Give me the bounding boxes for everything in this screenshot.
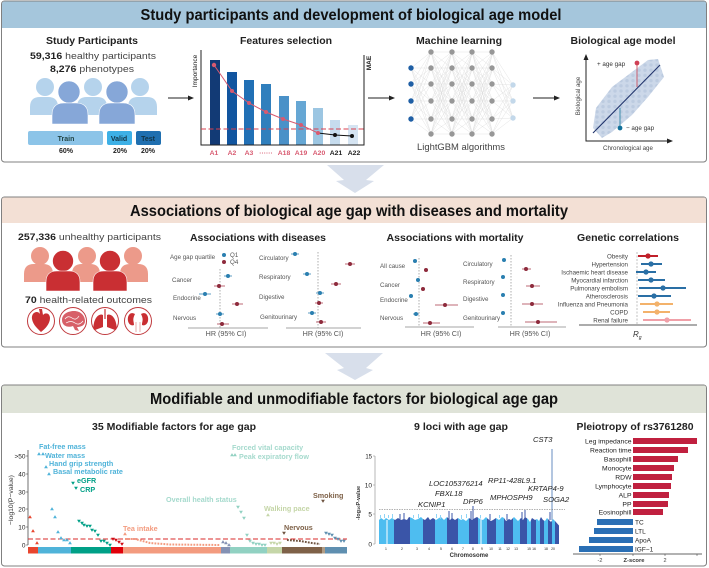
- panel: modifiable and unmodifiable factors: [2, 385, 706, 566]
- chart: genetic correlations: g: [639, 335, 642, 341]
- chart: genome-wide manhattan plot: 0: [368, 542, 372, 548]
- chart: genome-wide manhattan plot: 11: [498, 547, 502, 551]
- panel: study participants and model development: [2, 1, 706, 162]
- chart: genome-wide manhattan plot: 1: [385, 547, 387, 551]
- forest plot: mortality left: HR (95% CI): [421, 329, 461, 338]
- chart: genome-wide manhattan plot: 3: [416, 547, 418, 551]
- chart: pleiotropy z-score bars: Leg impedance: [585, 438, 632, 446]
- header band: panel 3: [2, 386, 706, 413]
- heading: associations with diseases: Associations with diseases: [190, 233, 326, 244]
- arrow: panel 2 to panel 3: [325, 353, 383, 380]
- data split bars: [28, 131, 161, 155]
- chart: genome-wide manhattan plot: KCNIP1: [418, 500, 445, 509]
- forest plot: mortality left: Cancer: [380, 282, 400, 289]
- chart: pleiotropy z-score bars: ALP: [619, 492, 632, 500]
- title: panel 1: Study participants and development of biological age model: [140, 7, 562, 24]
- chart: features importance bars with MAE curve: A21: [330, 150, 342, 157]
- forest plot: diseases right: Respiratory: [259, 274, 292, 281]
- chart: genetic correlations: Atherosclerosis: [586, 294, 628, 300]
- chart: features importance bars with MAE curve: A20: [313, 150, 325, 157]
- chart: biological vs chronological age: − age gap: [626, 125, 655, 132]
- chart: modifiable factors manhattan plot: Water mass: [45, 451, 85, 460]
- chart: genome-wide manhattan plot: [356, 435, 570, 559]
- heading: genetic correlations: Genetic correlations: [577, 233, 679, 244]
- forest plot: mortality right: Circulatory: [463, 261, 493, 268]
- chart: genome-wide manhattan plot: FBXL18: [435, 489, 463, 498]
- chart: features importance bars with MAE curve: A1: [210, 150, 219, 157]
- chart: genome-wide manhattan plot: KRTAP4-9: [528, 484, 564, 493]
- chart: features importance bars with MAE curve: A3: [245, 150, 254, 157]
- forest plot: diseases left: Q1: [230, 252, 239, 259]
- chart: modifiable factors manhattan plot: Fat-free mass: [39, 442, 86, 451]
- text: health outcomes: 70 health-related outcomes: [25, 295, 152, 306]
- forest plot: mortality right: Genitourinary: [463, 315, 501, 322]
- chart: genome-wide manhattan plot: 8: [472, 547, 474, 551]
- chart: genome-wide manhattan plot: DPP6: [463, 497, 484, 506]
- chart: pleiotropy z-score bars: ApoA: [635, 538, 652, 544]
- chart: genome-wide manhattan plot: LOC105376214: [429, 479, 483, 488]
- icon: kidneys: [124, 308, 152, 334]
- heading: features selection: Features selection: [240, 36, 332, 47]
- chart: pleiotropy z-score bars: Basophill: [604, 456, 632, 464]
- forest plot: mortality left: Endocrine: [380, 297, 408, 304]
- icon: heart: [28, 308, 54, 334]
- chart: genome-wide manhattan plot: 10: [489, 547, 493, 551]
- arrow: participants to features: [168, 97, 193, 99]
- chart: biological vs chronological age: [575, 55, 672, 152]
- forest plot: diseases right: HR (95% CI): [303, 329, 343, 338]
- forest plot: mortality left: Nervous: [380, 315, 403, 322]
- chart: modifiable factors manhattan plot: Walking pace: [264, 504, 310, 513]
- text: unhealthy participants: 257,336 unhealthy participants: [18, 232, 161, 243]
- heading: study participants: Study Participants: [46, 36, 138, 47]
- data split bars: Train: [58, 136, 74, 143]
- chart: genetic correlations: R: [633, 330, 639, 339]
- chart: genetic correlations: Hypertension: [592, 262, 629, 268]
- forest plot: diseases right: Genitourinary: [260, 314, 298, 321]
- forest plot: diseases left: Cancer: [172, 277, 192, 284]
- forest plot: diseases right: Circulatory: [259, 255, 289, 262]
- chart: genome-wide manhattan plot: 5: [440, 547, 442, 551]
- chart: features importance bars with MAE curve: A2: [228, 150, 237, 157]
- chart: pleiotropy z-score bars: TC: [635, 520, 644, 526]
- chart: modifiable factors manhattan plot: >50: [14, 454, 26, 460]
- chart: genome-wide manhattan plot: Chromosome: [450, 553, 489, 559]
- chart: genetic correlations: Influenza and Pneumonia: [558, 302, 629, 308]
- chart: pleiotropy z-score bars: RDW: [615, 474, 632, 482]
- chart: genome-wide manhattan plot: 15: [365, 454, 373, 460]
- chart: genetic correlations: Renal failure: [593, 318, 629, 324]
- chart: pleiotropy z-score bars: Monocyte: [602, 466, 632, 472]
- chart: genetic correlations: Myocardial infarction: [571, 278, 629, 284]
- chart: pleiotropy z-score bars: 2: [663, 558, 667, 564]
- chart: genetic correlations: COPD: [610, 310, 629, 316]
- text: participant counts: 8,276 phenotypes: [50, 64, 134, 75]
- forest plot: mortality left: [380, 258, 474, 338]
- forest plot: diseases right: Digestive: [259, 294, 285, 301]
- icon: group of people: [30, 78, 157, 124]
- chart: genome-wide manhattan plot: 10: [365, 482, 372, 490]
- data split bars: 60%: [59, 148, 74, 155]
- chart: genetic correlations: Ischaemic heart disease: [561, 270, 629, 276]
- data split bars: Valid: [111, 136, 127, 143]
- title: panel 2: Associations of biological age gap with diseases and mortality: [130, 203, 568, 220]
- chart: genome-wide manhattan plot: 7: [462, 547, 464, 551]
- forest plot: mortality left: All cause: [380, 263, 406, 270]
- chart: modifiable factors manhattan plot: Hand grip strength: [49, 459, 113, 468]
- heading: modifiable factors: 35 Modifiable factors for age gap: [92, 422, 256, 433]
- forest plot: diseases left: Nervous: [173, 315, 196, 322]
- chart: modifiable factors manhattan plot: 10: [18, 524, 26, 532]
- label: LightGBM algorithms: LightGBM algorithms: [417, 142, 505, 153]
- chart: features importance bars with MAE curve: [192, 50, 373, 157]
- heading: pleiotropy: Pleiotropy of rs3761280: [576, 422, 694, 433]
- chart: genome-wide manhattan plot: 18: [544, 547, 548, 551]
- chart: modifiable factors manhattan plot: −log10(P−value): [8, 475, 15, 525]
- chart: genome-wide manhattan plot: SOGA2: [543, 495, 570, 504]
- forest plot: diseases right: [259, 252, 361, 338]
- chart: genome-wide manhattan plot: 2: [401, 547, 403, 551]
- chart: pleiotropy z-score bars: Lymphocyte: [595, 484, 632, 490]
- forest plot: diseases left: Endocrine: [173, 295, 201, 302]
- chart: modifiable factors manhattan plot: Forced vital capacity: [232, 443, 303, 452]
- forest plot: diseases left: HR (95% CI): [206, 329, 246, 338]
- chart: modifiable factors manhattan plot: eGFR: [77, 476, 97, 485]
- header band: panel 2: [2, 198, 706, 223]
- arrow: features to machine learning: [368, 97, 394, 99]
- data split bars: 20%: [141, 148, 156, 155]
- icon: brain: [60, 308, 86, 334]
- chart: genome-wide manhattan plot: 20: [551, 547, 555, 551]
- chart: modifiable factors manhattan plot: Nervous: [284, 523, 313, 532]
- chart: modifiable factors manhattan plot: [8, 442, 347, 554]
- chart: genome-wide manhattan plot: -log10P-value: [356, 486, 362, 520]
- chart: pleiotropy z-score bars: Z-score: [624, 558, 645, 564]
- chart: features importance bars with MAE curve: A19: [295, 150, 307, 157]
- title: panel 3: Modifiable and unmodifiable factors for biological age gap: [150, 391, 558, 408]
- chart: genome-wide manhattan plot: RP11-428L9.1: [488, 476, 536, 485]
- forest plot: diseases left: Age gap quartile: [170, 254, 216, 261]
- chart: genome-wide manhattan plot: 15: [527, 547, 531, 551]
- forest plot: mortality right: Digestive: [463, 296, 489, 303]
- chart: genetic correlations: Obesity: [607, 254, 629, 260]
- icon: lungs: [92, 308, 118, 334]
- chart: modifiable factors manhattan plot: 30: [18, 490, 26, 496]
- forest plot: mortality right: HR (95% CI): [510, 329, 550, 338]
- diagram: neural network: [408, 49, 516, 137]
- chart: genome-wide manhattan plot: 12: [506, 547, 510, 551]
- chart: genome-wide manhattan plot: MPHOSPH9: [490, 493, 533, 502]
- chart: modifiable factors manhattan plot: 40: [18, 472, 26, 478]
- forest plot: diseases left: Q4: [230, 259, 239, 266]
- panel: associations with diseases and mortality: [2, 197, 706, 347]
- arrow: machine learning to model: [533, 97, 559, 99]
- chart: features importance bars with MAE curve: A18: [278, 150, 290, 157]
- chart: biological vs chronological age: Biological age: [575, 76, 582, 115]
- chart: features importance bars with MAE curve: Importance: [192, 54, 199, 87]
- chart: modifiable factors manhattan plot: Peak expiratory flow: [239, 452, 309, 461]
- chart: pleiotropy z-score bars: LTL: [635, 528, 646, 536]
- chart: modifiable factors manhattan plot: 0: [22, 542, 26, 550]
- chart: biological vs chronological age: Chronological age: [603, 145, 653, 152]
- chart: biological vs chronological age: + age gap: [597, 61, 626, 68]
- chart: modifiable factors manhattan plot: Overall health status: [166, 495, 237, 504]
- chart: genetic correlations: Pulmonary embolism: [570, 286, 628, 292]
- chart: modifiable factors manhattan plot: Basal metabolic rate: [53, 467, 123, 476]
- chart: modifiable factors manhattan plot: Smoking: [313, 491, 343, 500]
- heading: biological age model: Biological age model: [570, 36, 676, 47]
- chart: features importance bars with MAE curve: A22: [348, 150, 360, 157]
- chart: modifiable factors manhattan plot: Tea intake: [123, 524, 158, 533]
- chart: genome-wide manhattan plot: CST3: [533, 435, 553, 444]
- heading: machine learning: Machine learning: [416, 36, 502, 47]
- chart: modifiable factors manhattan plot: 20: [18, 506, 26, 514]
- icon: group of unhealthy people: [24, 247, 148, 291]
- chart: genome-wide manhattan plot: 6: [451, 547, 453, 551]
- heading: 9 loci: 9 loci with age gap: [414, 422, 508, 433]
- chart: modifiable factors manhattan plot: CRP: [80, 485, 95, 494]
- chart: pleiotropy z-score bars: -2: [598, 558, 602, 564]
- chart: genetic correlations: [558, 252, 697, 341]
- chart: features importance bars with MAE curve: ······: [259, 150, 273, 157]
- chart: genome-wide manhattan plot: 13: [514, 547, 518, 551]
- forest plot: mortality right: Respiratory: [463, 279, 496, 286]
- heading: associations with mortality: Associations with mortality: [386, 233, 524, 244]
- data split bars: 20%: [113, 148, 128, 155]
- chart: features importance bars with MAE curve: MAE: [366, 55, 373, 70]
- chart: pleiotropy z-score bars: [573, 438, 702, 564]
- header band: panel 1: [2, 2, 706, 28]
- chart: genome-wide manhattan plot: 5: [368, 512, 372, 518]
- chart: pleiotropy z-score bars: Reaction time: [590, 448, 632, 454]
- text: participant counts: [30, 51, 156, 75]
- chart: pleiotropy z-score bars: IGF−1: [635, 546, 654, 554]
- chart: genome-wide manhattan plot: 16: [532, 547, 536, 551]
- chart: genome-wide manhattan plot: 9: [481, 547, 483, 551]
- forest plot: diseases left: [170, 252, 268, 338]
- data split bars: Test: [141, 136, 156, 143]
- forest plot: mortality right: [463, 255, 566, 338]
- text: participant counts: 59,316 healthy participants: [30, 51, 156, 62]
- chart: genome-wide manhattan plot: 4: [428, 547, 430, 551]
- arrow: panel 1 to panel 2: [327, 165, 384, 193]
- chart: pleiotropy z-score bars: Eosinophill: [599, 510, 632, 516]
- chart: pleiotropy z-score bars: PP: [622, 502, 632, 508]
